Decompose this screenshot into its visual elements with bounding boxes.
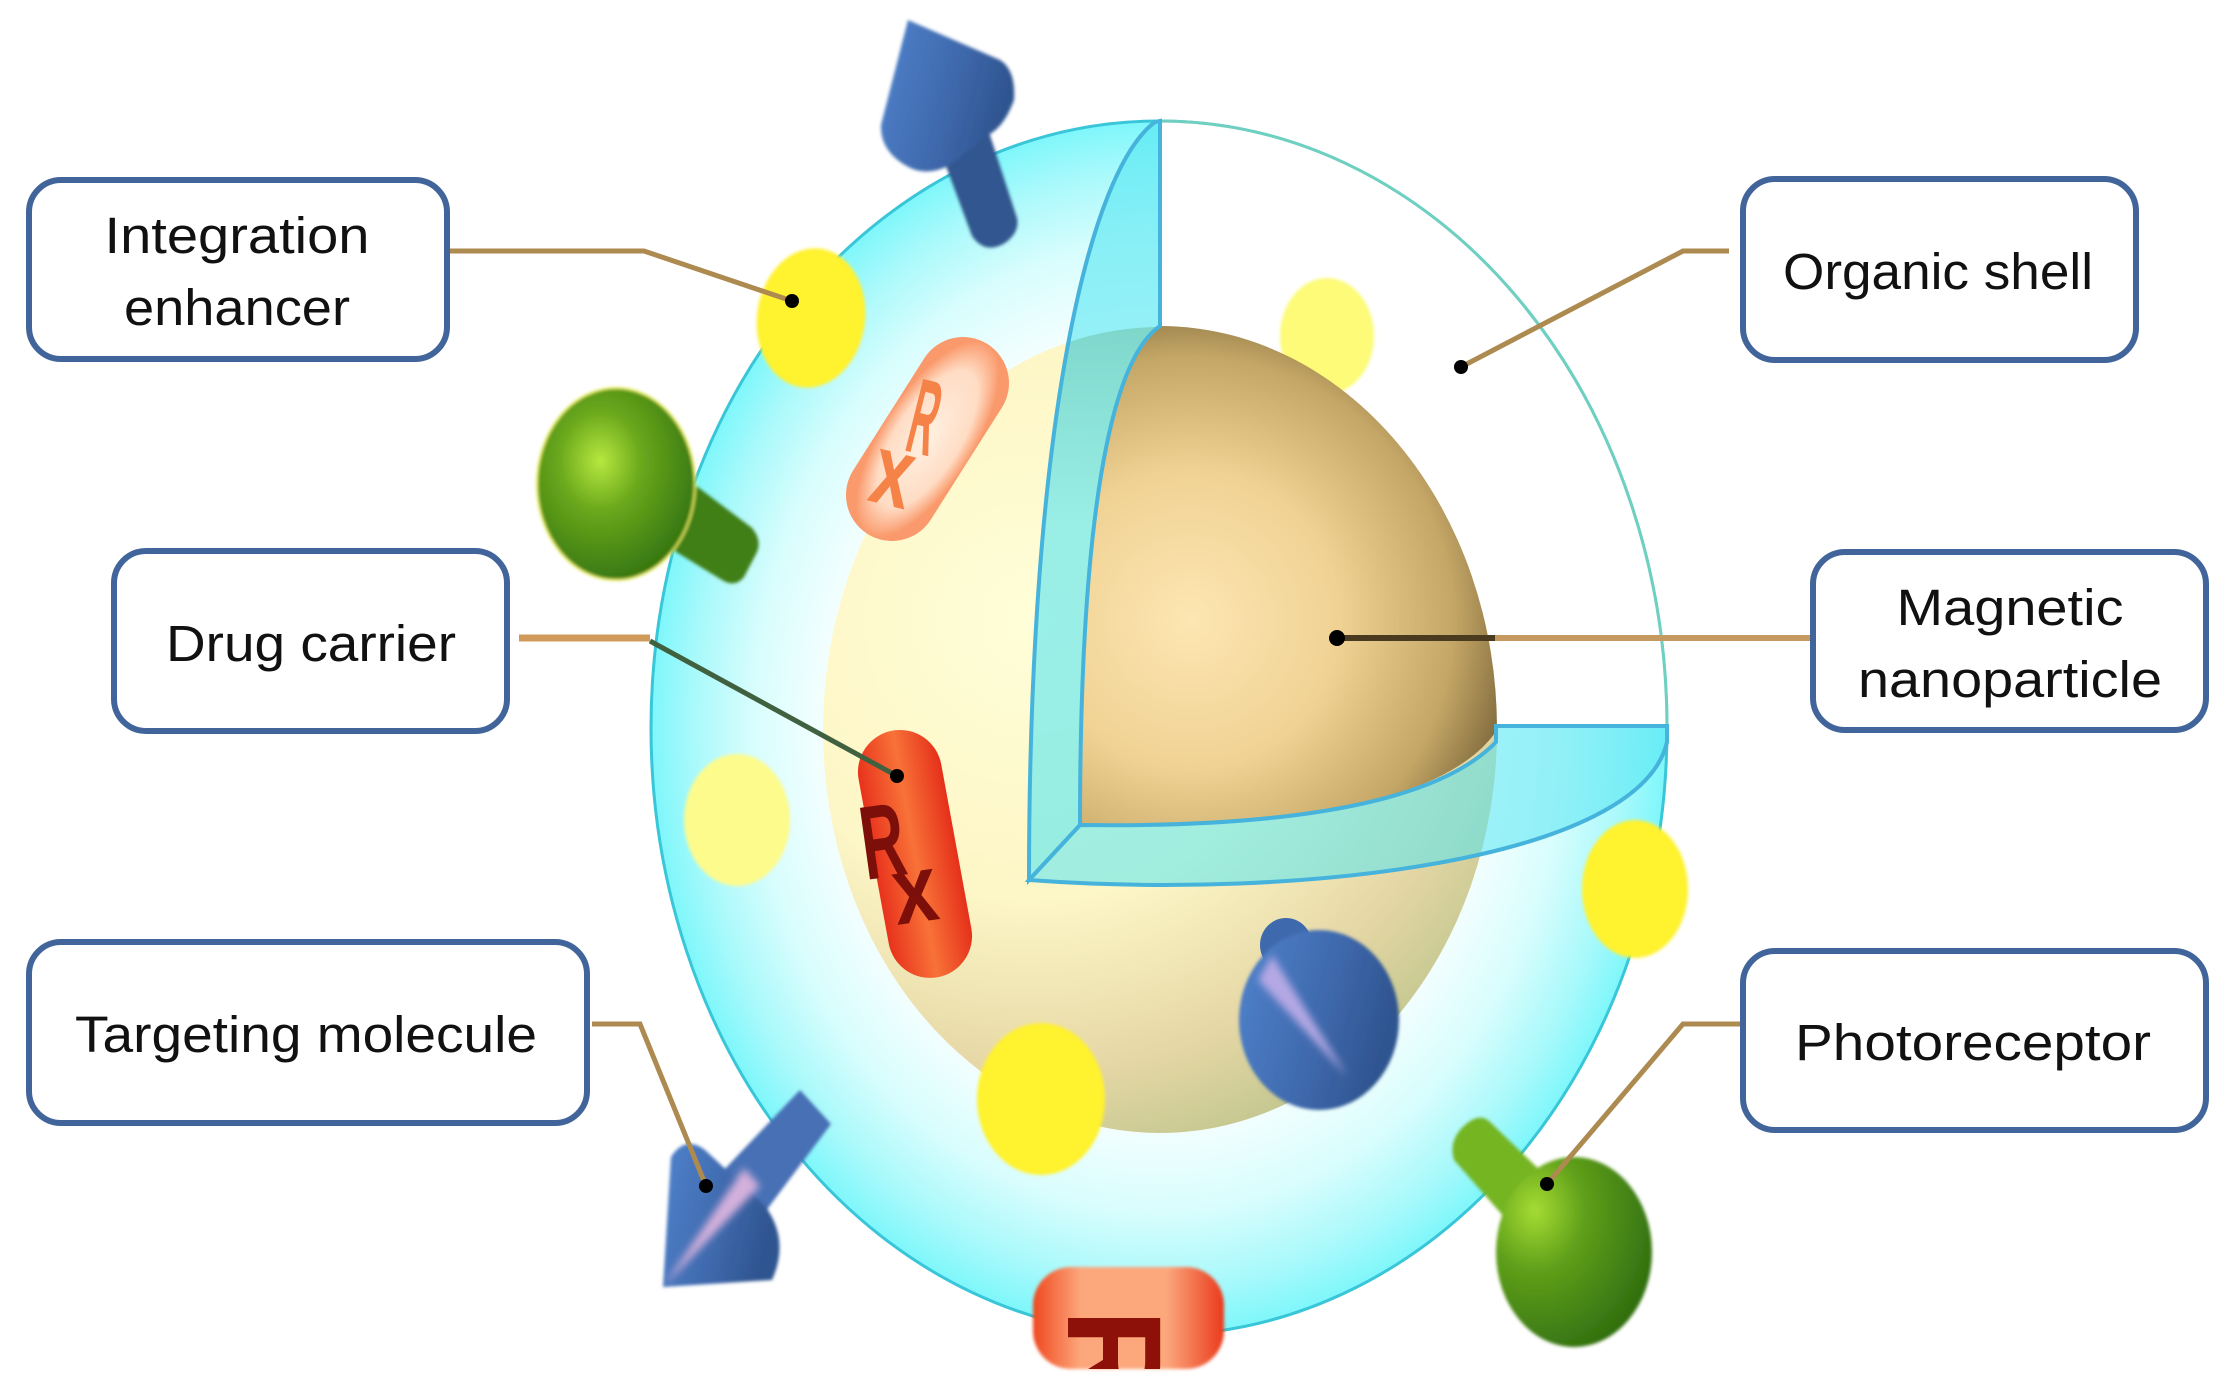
label box: Photoreceptor: Photoreceptor xyxy=(1795,1014,2151,1071)
label box: Magnetic nanoparticle: nanoparticle xyxy=(1858,651,2162,708)
cut-away quadrant xyxy=(1160,121,1667,726)
targeting molecule bottom-left xyxy=(663,1090,831,1287)
label box: Magnetic nanoparticle xyxy=(1813,552,2206,730)
label box: Targeting molecule xyxy=(29,942,587,1123)
label box: Integration enhancer: Integration xyxy=(104,207,370,264)
drug carrier pill red: R xyxy=(853,780,912,903)
yellow enhancer right xyxy=(1582,820,1688,958)
shell cross-section horizontal panel xyxy=(1029,726,1667,885)
leader: drug carrier xyxy=(519,638,904,783)
integration enhancer yellow top xyxy=(748,241,874,395)
organic shell sphere xyxy=(651,121,1667,1335)
label box: Magnetic nanoparticle: Magnetic xyxy=(1896,579,2124,636)
photoreceptor green upper-left xyxy=(537,388,759,583)
label box: Organic shell: Organic shell xyxy=(1783,243,2093,300)
leader: organic shell xyxy=(1454,251,1729,374)
label box: Integration enhancer xyxy=(29,180,447,359)
leader: magnetic nanoparticle xyxy=(1329,630,1811,646)
faded drug pill xyxy=(828,320,1027,558)
drug pill at bottom xyxy=(1030,1264,1227,1372)
targeting molecule top xyxy=(881,20,1018,248)
magnetic nanoparticle core xyxy=(1080,326,1497,825)
label box: Photoreceptor xyxy=(1743,951,2206,1130)
faded drug pill: x xyxy=(861,412,927,531)
shadowed core top under panel xyxy=(1054,327,1155,457)
pale yellow enhancer behind core xyxy=(1280,278,1374,394)
leader: targeting molecule xyxy=(592,1024,713,1193)
magnetic core lower part xyxy=(823,327,1497,1133)
label box: Organic shell xyxy=(1743,179,2136,360)
leader: integration enhancer xyxy=(450,251,799,308)
pale yellow enhancer left xyxy=(684,754,790,886)
label box: Targeting molecule: Targeting molecule xyxy=(75,1006,537,1063)
targeting molecule on core xyxy=(1239,918,1399,1110)
photoreceptor green bottom-right xyxy=(1452,1118,1652,1347)
label box: Drug carrier xyxy=(114,551,507,731)
faded drug pill: R xyxy=(897,357,952,480)
yellow enhancer bottom xyxy=(977,1023,1105,1175)
drug carrier pill red: x xyxy=(885,833,944,945)
drug carrier pill red xyxy=(851,723,979,985)
label box: Drug carrier: Drug carrier xyxy=(166,615,456,672)
leader: photoreceptor xyxy=(1540,1024,1740,1191)
shell cross-section vertical panel xyxy=(1029,121,1160,880)
label box: Integration enhancer: enhancer xyxy=(124,279,350,336)
